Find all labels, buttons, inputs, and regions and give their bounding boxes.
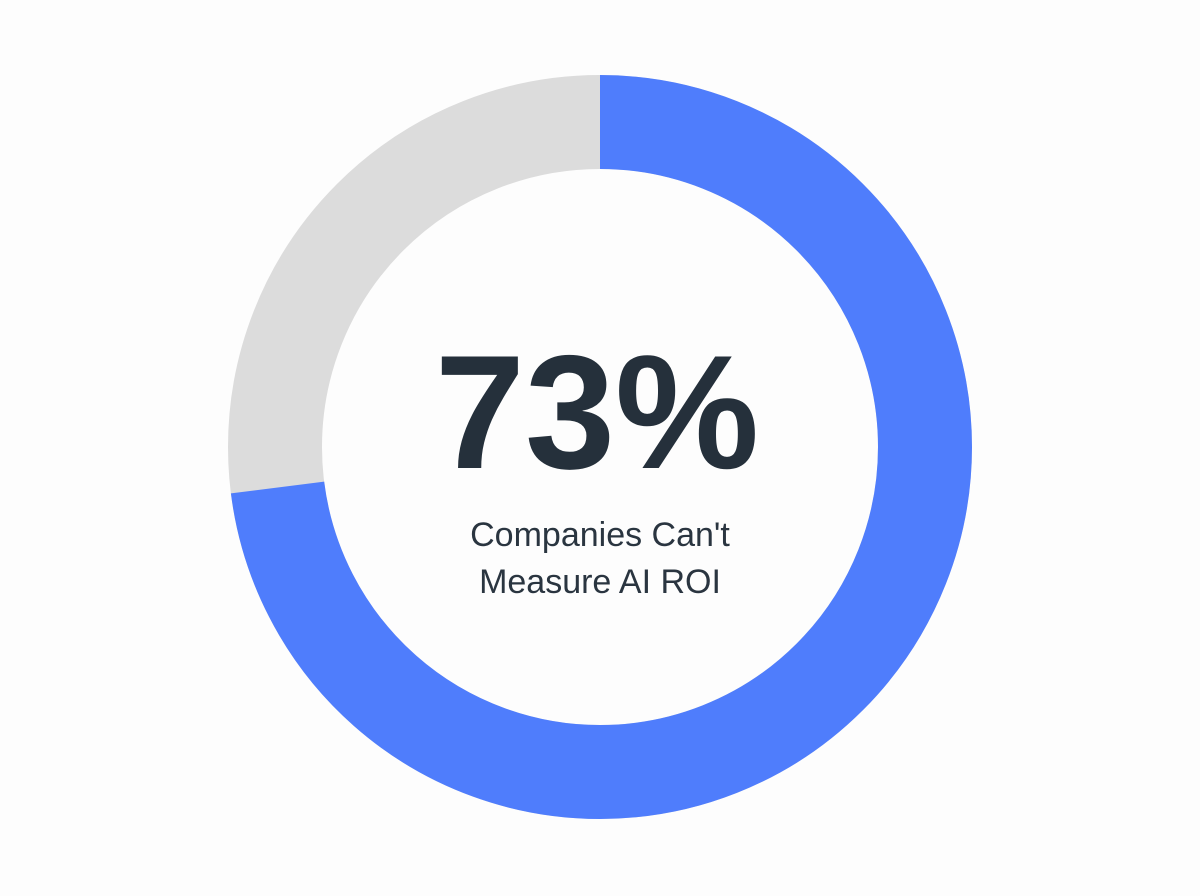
caption: [470, 516, 730, 601]
caption: Measure AI ROI: [479, 563, 721, 601]
donut track: remaining 27%: [275, 122, 925, 772]
donut segment: 73%: [275, 122, 925, 772]
caption: Companies Can't: [470, 516, 730, 554]
big number: 73%: [435, 322, 759, 503]
